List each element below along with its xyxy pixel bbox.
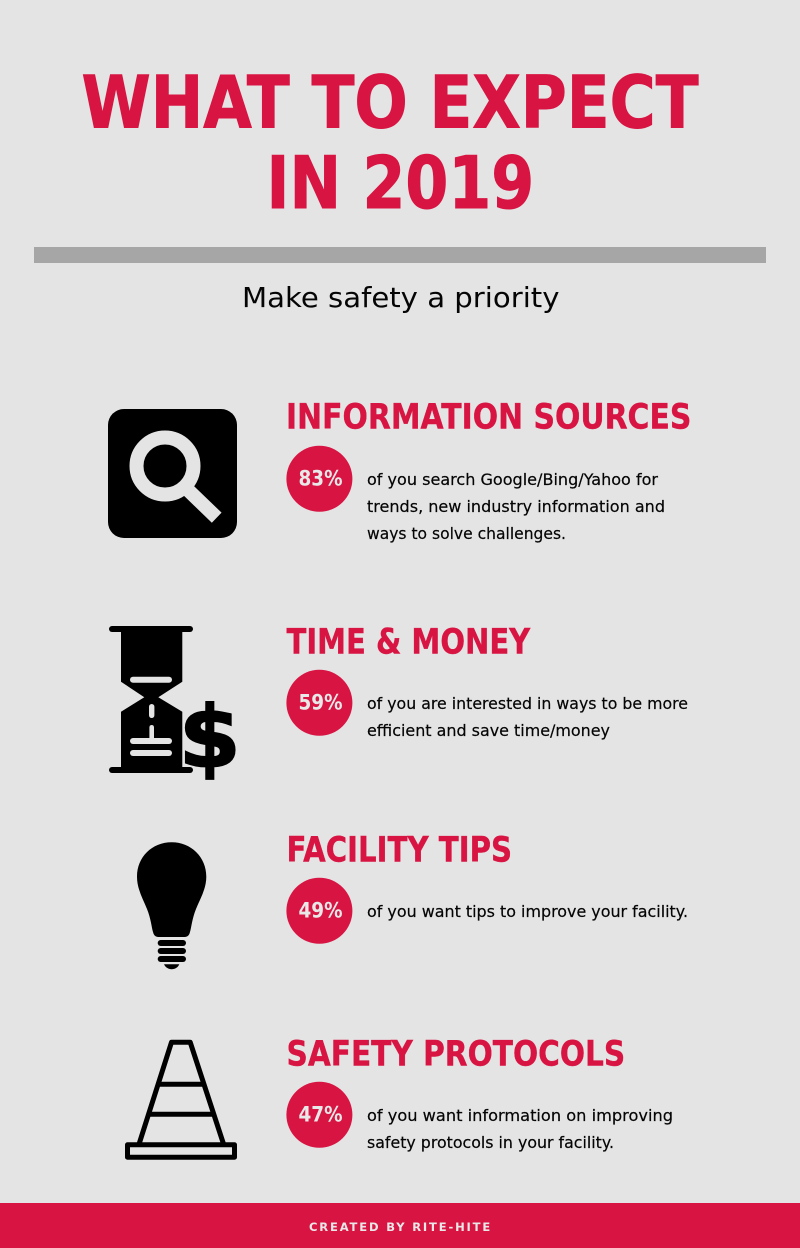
icon: traffic cone: [128, 1042, 234, 1157]
panel: facility tips: [137, 829, 688, 969]
badge: 49%: 49%: [298, 897, 342, 923]
badge: 83%: 83%: [298, 465, 342, 491]
heading: safety protocols: SAFETY PROTOCOLS: [286, 1033, 625, 1074]
badge: 49%: [286, 878, 352, 944]
title: IN 2019: [266, 141, 534, 225]
subtitle: Make safety a priority: [242, 282, 559, 314]
text block: facility tips: of you want tips to improve your facility.: [367, 902, 688, 921]
text block: safety protocols: [367, 1106, 673, 1152]
text block: information sources: [367, 470, 665, 543]
text block: safety protocols: of you want information on improving: [367, 1106, 673, 1125]
heading: information sources: INFORMATION SOURCES: [286, 396, 691, 437]
panel: time and money: [109, 621, 688, 787]
title: [82, 60, 699, 225]
badge: 47%: [286, 1082, 352, 1148]
icon: magnifying glass: [108, 409, 237, 538]
icon: hourglass and dollar sign: $: [179, 689, 240, 787]
text block: information sources: of you search Google/Bing/Yahoo for: [367, 470, 658, 489]
title: WHAT TO EXPECT: [82, 60, 699, 145]
text block: safety protocols: safety protocols in your facility.: [367, 1133, 614, 1152]
panel: safety protocols: [128, 1033, 673, 1157]
divider bar: [34, 247, 766, 263]
text block: time and money: of you are interested in ways to be more: [367, 694, 688, 713]
text block: time and money: efficient and save time/money: [367, 721, 610, 740]
icon: light bulb: [137, 842, 206, 969]
heading: facility tips: FACILITY TIPS: [286, 829, 512, 870]
badge: 59%: 59%: [298, 689, 342, 715]
footer: CREATED BY RITE-HITE: [309, 1220, 492, 1234]
panel: information sources: [108, 396, 691, 543]
footer: [0, 1203, 800, 1248]
text block: information sources: ways to solve challenges.: [367, 524, 566, 543]
text block: time and money: [367, 694, 688, 740]
badge: 83%: [286, 446, 352, 512]
badge: 47%: 47%: [298, 1101, 342, 1127]
badge: 59%: [286, 670, 352, 736]
text block: information sources: trends, new industry information and: [367, 497, 665, 516]
heading: time and money: TIME & MONEY: [286, 621, 531, 662]
icon: hourglass and dollar sign: [109, 626, 240, 787]
